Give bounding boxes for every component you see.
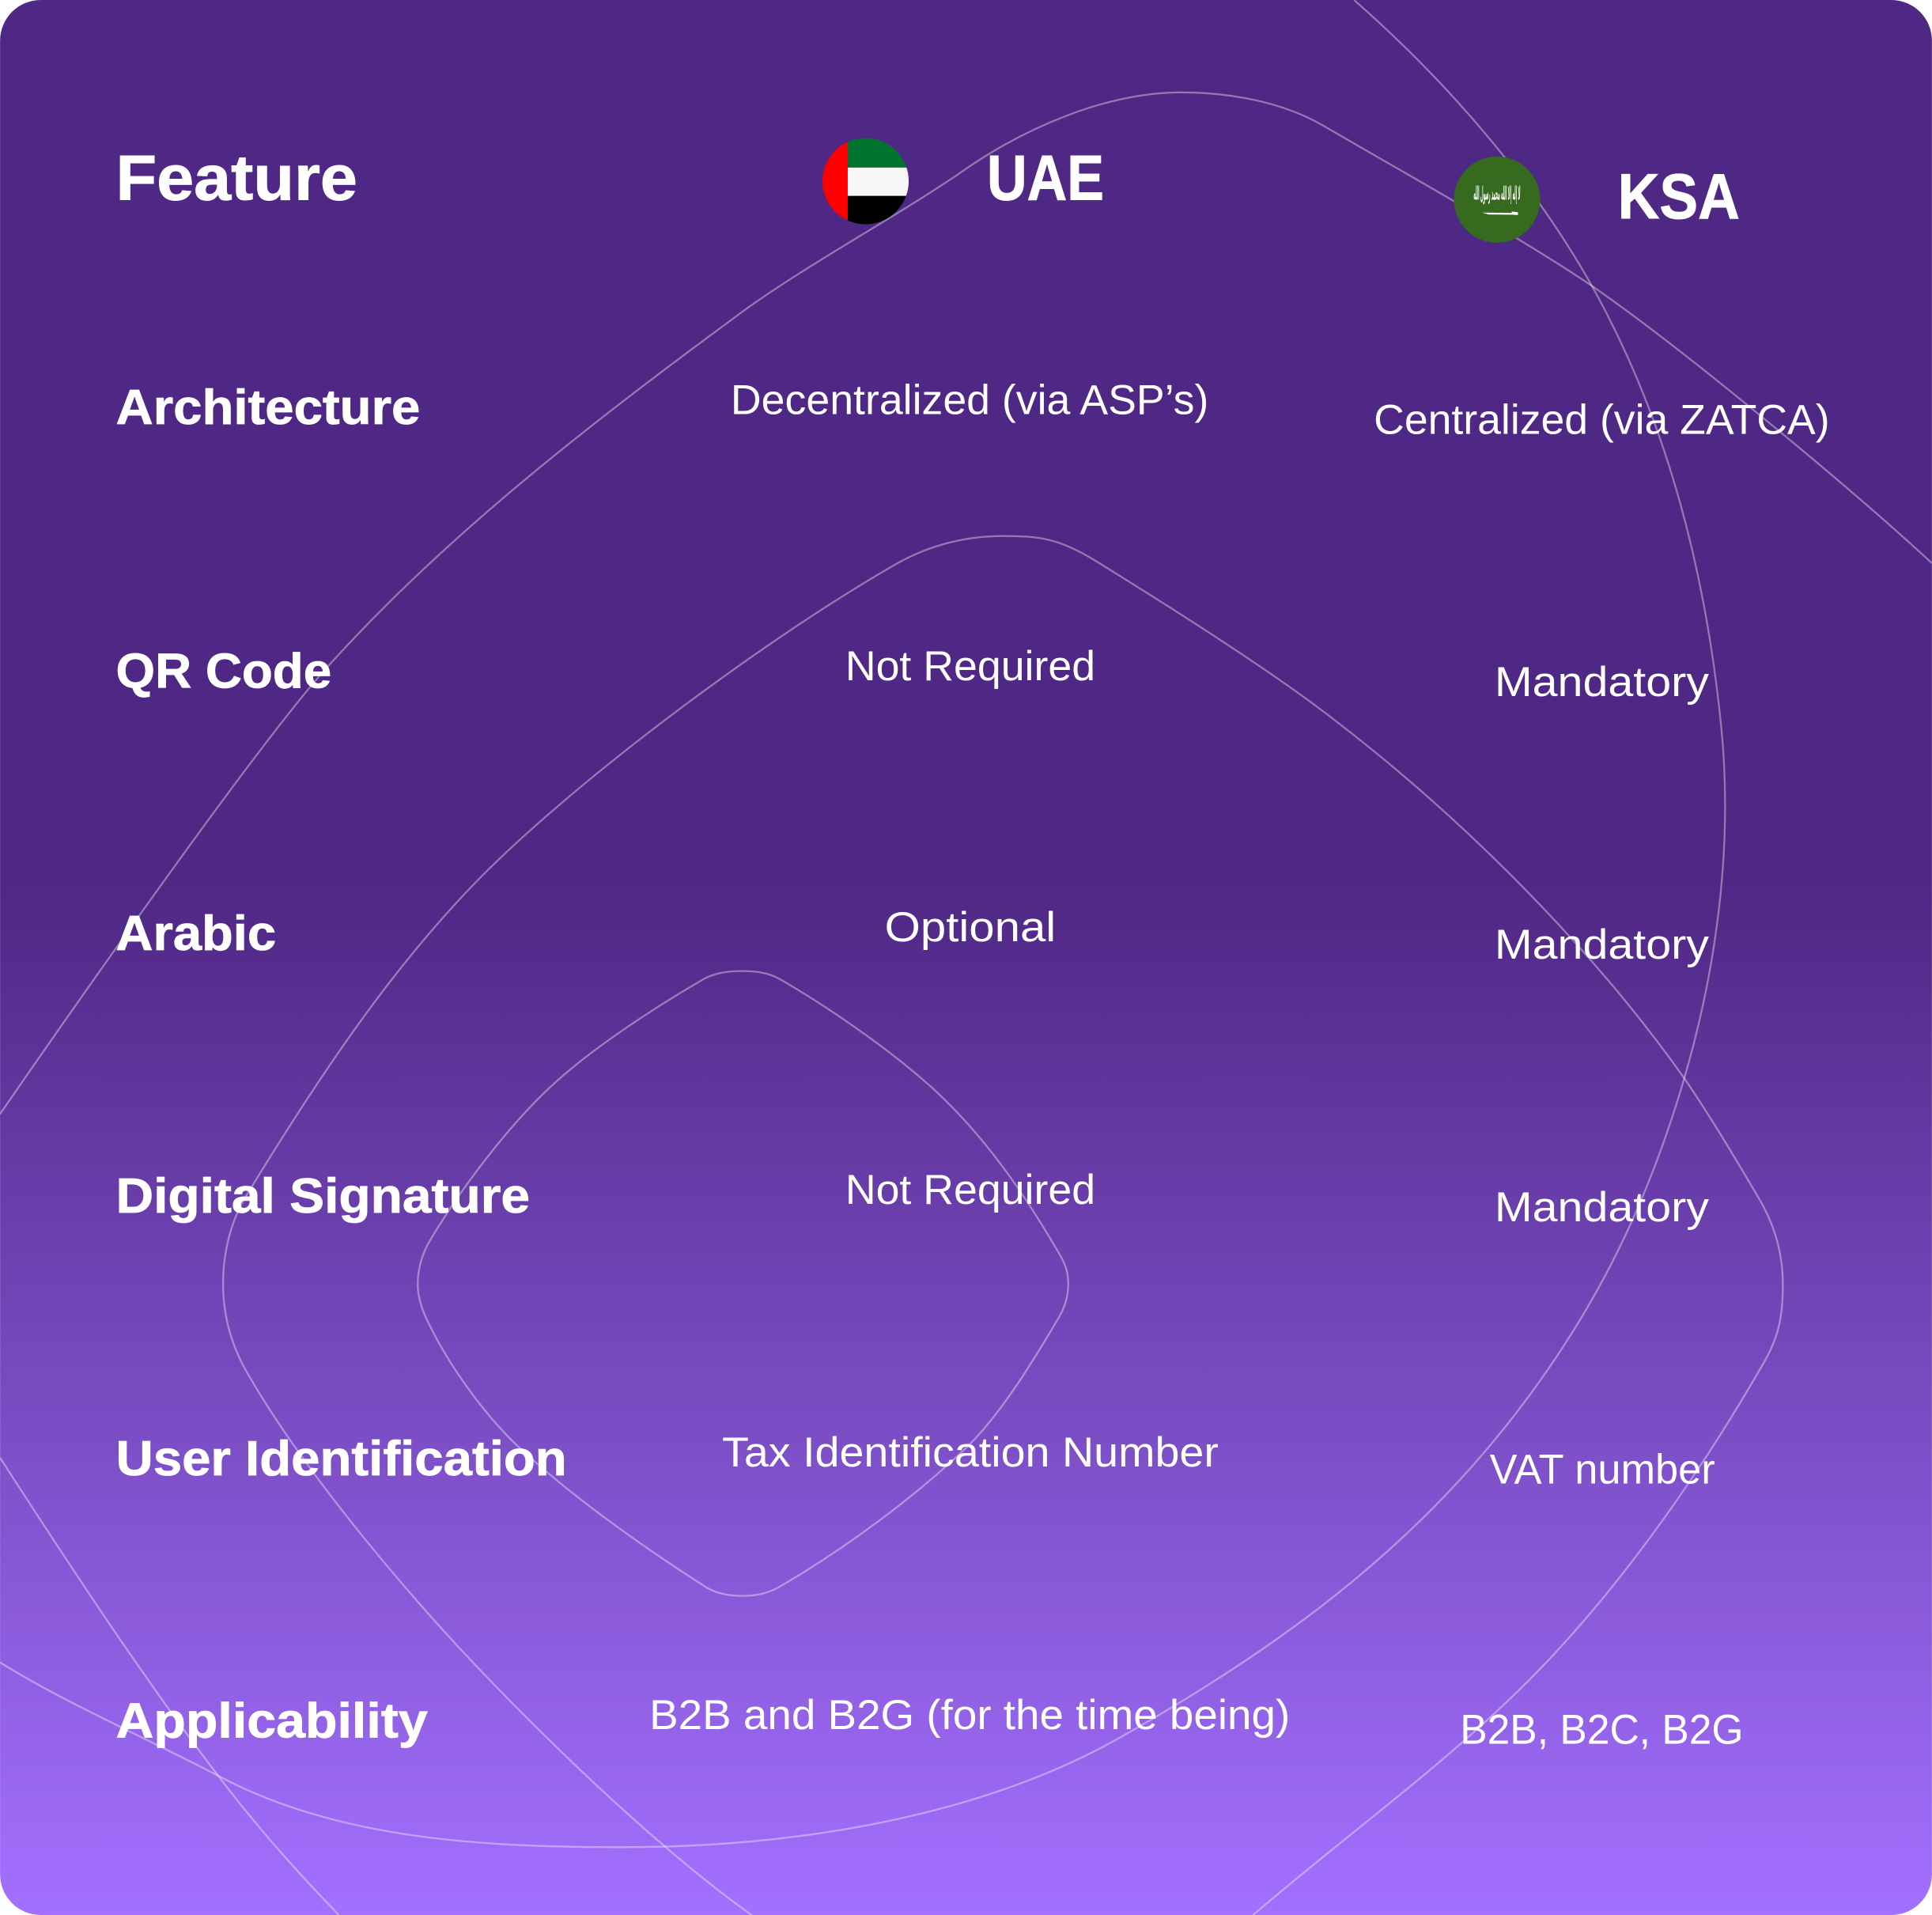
- row: Arabic: Mandatory: [1495, 922, 1709, 968]
- text: لا إله إلا الله محمد رسول الله: [1473, 182, 1521, 205]
- row: User Identification: User Identification: [116, 1432, 567, 1486]
- row: QR Code: QR Code: [116, 644, 331, 698]
- row: QR Code: Mandatory: [1495, 659, 1709, 706]
- row: Digital Signature: Mandatory: [1495, 1184, 1709, 1231]
- row: Applicability: Applicability: [116, 1694, 428, 1749]
- row: Architecture: Centralized (via ZATCA): [1374, 396, 1830, 443]
- icon: Saudi flag: [1454, 157, 1540, 243]
- row: Digital Signature: Not Required: [845, 1167, 1095, 1213]
- row: Architecture: [116, 377, 1830, 443]
- row: Applicability: B2B, B2C, B2G: [1460, 1706, 1744, 1753]
- heading: KSA: KSA: [1618, 161, 1740, 233]
- row: Digital Signature: Digital Signature: [116, 1169, 530, 1224]
- row: User Identification: VAT number: [1490, 1447, 1715, 1493]
- icon: UAE flag: [822, 138, 909, 225]
- row: User Identification: Tax Identification Number: [722, 1429, 1219, 1476]
- heading: Feature: Feature: [116, 142, 357, 214]
- row: Digital Signature: [116, 1167, 1709, 1231]
- row: Arabic: Optional: [885, 904, 1056, 951]
- row: Applicability: B2B and B2G (for the time being): [649, 1692, 1290, 1739]
- row: User Identification: [116, 1429, 1715, 1493]
- heading: UAE: UAE: [987, 142, 1104, 214]
- row: QR Code: Not Required: [845, 643, 1095, 690]
- row: Arabic: [116, 904, 1709, 968]
- row: Architecture: Decentralized (via ASP’s): [731, 377, 1208, 423]
- row: Applicability: [116, 1692, 1744, 1753]
- row: Arabic: Arabic: [116, 906, 276, 961]
- row: Architecture: Architecture: [116, 380, 420, 435]
- row: QR Code: [116, 643, 1709, 706]
